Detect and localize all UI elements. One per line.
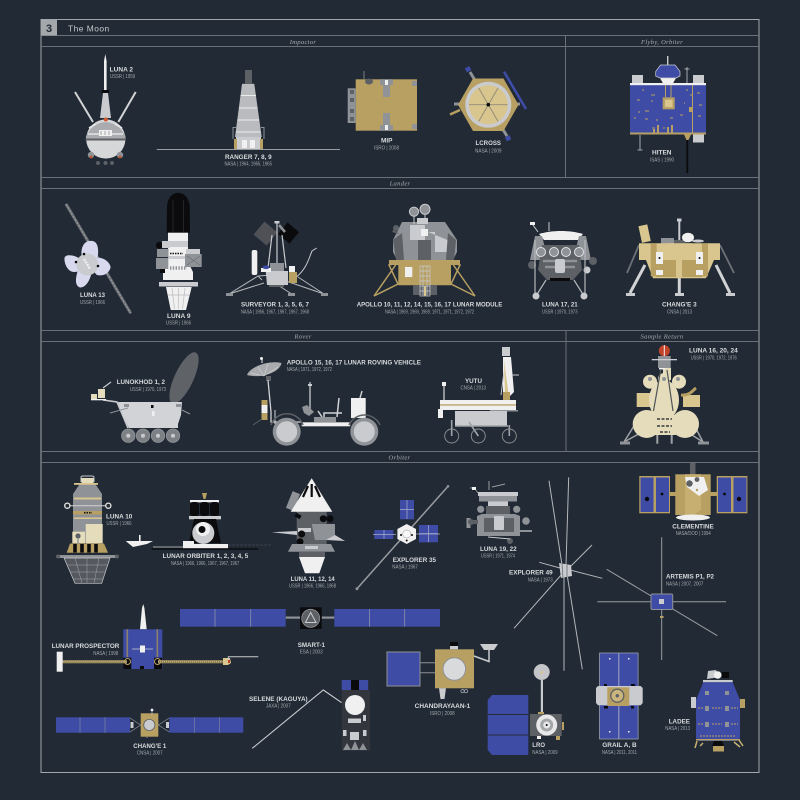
spacecraft: Chang'e 1 — [56, 709, 243, 757]
label: Lunokhod: USSR | 1970, 1973 — [130, 387, 166, 393]
icon: Lunokhod — [91, 349, 204, 443]
category: Flyby, Orbiter: Flyby, Orbiter — [640, 39, 683, 46]
label: Luna 19: LUNA 19, 22 — [480, 546, 517, 553]
icon: LADEE — [691, 670, 745, 752]
label: Chandrayaan-1: CHANDRAYAAN-1 — [415, 703, 471, 710]
label: Explorer 49 — [509, 570, 553, 583]
label: Luna 16: USSR | 1970, 1972, 1976 — [691, 355, 737, 361]
icon: Surveyor — [226, 221, 328, 296]
label: Ranger: RANGER 7, 8, 9 — [225, 154, 272, 161]
label: Luna 2 — [110, 66, 135, 80]
label: Yutu: CNSA | 2013 — [460, 386, 486, 392]
icon: Ranger — [157, 70, 340, 150]
label: Chang'e 1: CHANG'E 1 — [133, 743, 167, 750]
spacecraft: Ranger 7, 8, 9 — [157, 70, 340, 168]
label: Luna 10: LUNA 10 — [106, 514, 133, 520]
icon: Chang'e 3 — [626, 218, 735, 296]
label: Chandrayaan-1 — [415, 703, 471, 717]
spacecraft: MIP — [348, 71, 417, 151]
icon: Yutu — [438, 347, 519, 443]
label: LRO: NASA | 2009 — [532, 750, 558, 756]
label: Luna 11: USSR | 1966, 1966, 1968 — [289, 584, 336, 590]
label: Luna 13 — [80, 292, 105, 306]
label: Luna 16: LUNA 16, 20, 24 — [689, 348, 738, 354]
icon: Hiten — [630, 56, 706, 173]
icon: Luna 19 — [466, 481, 532, 544]
category: Sample Return: Sample Return — [641, 334, 684, 340]
label: Explorer 35: EXPLORER 35 — [393, 557, 436, 564]
spacecraft: Explorer 35 — [356, 485, 449, 590]
label: LRV — [287, 360, 421, 373]
label: Surveyor — [241, 301, 309, 315]
spacecraft: Smart-1 — [180, 607, 440, 656]
label: Luna 17: LUNA 17, 21 — [542, 301, 578, 308]
label: Chang'e 1 — [133, 743, 167, 757]
label: Hiten: HITEN — [652, 150, 672, 156]
label: Lunar Prospector — [52, 643, 120, 657]
spacecraft: Chandrayaan-1 — [387, 642, 498, 717]
label: Chang'e 3 — [662, 301, 697, 315]
label: Artemis — [666, 574, 714, 587]
spacecraft: Luna 2 — [75, 54, 136, 165]
label: MIP: MIP — [381, 137, 392, 144]
label: Luna 2: LUNA 2 — [110, 66, 134, 74]
icon: MIP — [348, 71, 417, 131]
icon: Lunar Orbiter — [126, 493, 272, 550]
label: LADEE: NASA | 2013 — [665, 726, 690, 732]
icon: Chandrayaan-1 — [387, 642, 498, 699]
label: MIP — [374, 137, 399, 151]
label: Surveyor: SURVEYOR 1, 3, 5, 6, 7 — [241, 301, 309, 308]
spacecraft: LCROSS — [450, 66, 526, 154]
label: Luna 19 — [480, 546, 517, 560]
spacecraft: Apollo Lunar Module — [357, 204, 502, 315]
icon: Lunar Prospector — [57, 604, 258, 672]
label: LCROSS: NASA | 2009 — [475, 148, 502, 154]
icon: Smart-1 — [180, 607, 440, 629]
icon: LRO — [488, 664, 564, 755]
label: Luna 11: LUNA 11, 12, 14 — [291, 576, 335, 583]
label: Lunar Prospector: NASA | 1998 — [93, 651, 118, 657]
label: Selene: SELENE (KAGUYA) — [249, 696, 308, 703]
label: Artemis: NASA | 2007, 2007 — [666, 581, 703, 587]
label: Explorer 49: EXPLORER 49 — [509, 570, 553, 576]
spacecraft: Luna 13 — [64, 204, 131, 313]
icon: Explorer 49 — [514, 477, 602, 671]
spacecraft: Luna 10 — [56, 476, 133, 583]
label: LADEE: LADEE — [669, 718, 690, 726]
label: Lunar Orbiter — [163, 553, 249, 567]
spacecraft: Lunar Prospector — [52, 604, 258, 672]
label: Chandrayaan-1: ISRO | 2008 — [430, 711, 455, 717]
title: 3 — [46, 23, 52, 35]
label: Chang'e 1: CNSA | 2007 — [137, 751, 163, 757]
label: Luna 17 — [542, 301, 578, 315]
label: Apollo LM — [357, 301, 502, 315]
spacecraft: Luna 9 — [156, 193, 202, 327]
label: Clementine: NASA/DOD | 1994 — [676, 531, 711, 537]
icon: Luna 17 — [528, 222, 597, 300]
label: Clementine: CLEMENTINE — [672, 524, 714, 530]
label: Luna 9 — [166, 313, 191, 327]
label: LCROSS — [475, 140, 502, 154]
label: LCROSS: LCROSS — [476, 140, 501, 147]
label: GRAIL: GRAIL A, B — [602, 742, 637, 749]
label: Chang'e 3: CHANG'E 3 — [662, 301, 697, 308]
icon: Chang'e 1 — [56, 709, 243, 738]
label: Luna 19: USSR | 1971, 1974 — [481, 554, 515, 560]
label: Smart-1 — [298, 642, 325, 656]
spacecraft: Explorer 49 — [509, 477, 602, 671]
label: LRV: NASA | 1971, 1972, 1972 — [287, 367, 332, 373]
label: Lunar Prospector: LUNAR PROSPECTOR — [52, 643, 120, 650]
label: Luna 9: USSR | 1966 — [166, 321, 191, 327]
spacecraft: Luna 19, 22 — [466, 481, 532, 560]
label: Yutu: YUTU — [465, 378, 482, 385]
category: Orbiter: Orbiter — [389, 454, 411, 462]
icon: Clementine — [639, 463, 747, 520]
spacecraft: Hiten — [630, 56, 706, 173]
label: Ranger: NASA | 1964, 1965, 1965 — [224, 162, 272, 168]
label: Luna 13: USSR | 1966 — [80, 300, 105, 306]
label: LRV: APOLLO 15, 16, 17 LUNAR ROVING VEHICLE — [287, 360, 421, 366]
label: Ranger — [224, 154, 272, 168]
spacecraft: Luna 16, 20, 24 — [620, 345, 738, 444]
label: GRAIL — [602, 742, 637, 756]
icon: Artemis — [597, 537, 726, 660]
label: Luna 13: LUNA 13 — [80, 292, 105, 299]
label: Selene — [249, 696, 308, 710]
label: Smart-1: ESA | 2003 — [300, 650, 323, 656]
title — [41, 20, 110, 36]
label: Hiten — [650, 150, 674, 164]
title: The Moon — [68, 24, 110, 34]
spacecraft: Selene — [249, 680, 370, 751]
label: Explorer 35 — [392, 557, 436, 570]
spacecraft: GRAIL A, B — [596, 653, 643, 756]
label: Lunokhod — [117, 379, 166, 393]
label: Lunokhod: LUNOKHOD 1, 2 — [117, 379, 165, 386]
icon: Luna 11 — [272, 478, 345, 573]
spacecraft: Luna 11, 12, 14 — [272, 478, 345, 590]
label: LADEE — [665, 718, 690, 732]
label: Luna 10: USSR | 1966 — [106, 521, 132, 527]
icon: LCROSS — [450, 66, 526, 141]
label: Artemis: ARTEMIS P1, P2 — [666, 574, 714, 580]
spacecraft: Chang'e 3 — [626, 218, 735, 315]
label: Chang'e 3: CNSA | 2013 — [667, 309, 692, 315]
spacecraft: Surveyor — [226, 221, 328, 315]
label: Luna 11 — [289, 576, 336, 590]
spacecraft: Luna 17, 21 — [528, 222, 597, 315]
category: Lander: Lander — [389, 180, 411, 188]
label: Clementine — [672, 524, 714, 537]
label: GRAIL: NASA | 2011, 2011 — [602, 750, 637, 756]
spacecraft: Yutu — [438, 347, 519, 443]
label: Luna 10 — [106, 514, 133, 527]
icon: Luna 16 — [620, 345, 709, 444]
label: Explorer 49: NASA | 1973 — [528, 577, 553, 583]
label: Lunar Orbiter: NASA | 1966, 1966, 1967, 1967, 1967 — [171, 561, 239, 567]
icon: GRAIL — [596, 653, 643, 739]
label: Explorer 35: NASA | 1967 — [392, 564, 418, 570]
spacecraft: Artemis P1, P2 — [597, 537, 726, 660]
category: Rover: Rover — [293, 334, 312, 340]
spacecraft: Clementine — [639, 463, 747, 537]
icon: LRV — [247, 357, 380, 446]
icon: Luna 13 — [64, 204, 131, 313]
spacecraft: Lunar Roving Vehicle — [247, 357, 421, 446]
category: Impactor: Impactor — [289, 39, 316, 46]
icon: Selene — [252, 680, 370, 751]
label: Luna 17: USSR | 1970, 1973 — [542, 309, 578, 315]
icon: Explorer 35 — [356, 485, 449, 590]
label: Luna 2: USSR | 1959 — [110, 74, 135, 80]
label: Apollo LM: APOLLO 10, 11, 12, 14, 15, 16, 17 LUNAR MODULE — [357, 301, 502, 308]
icon: Luna 10 — [56, 476, 119, 583]
spacecraft: LADEE — [665, 670, 745, 752]
icon: Apollo LM — [374, 204, 475, 296]
label: Hiten: ISAS | 1990 — [650, 158, 674, 164]
label: Selene: JAXA | 2007 — [266, 704, 291, 710]
label: Yutu — [460, 378, 486, 392]
icon: Luna 2 — [75, 54, 136, 165]
spacecraft: Lunokhod — [91, 349, 204, 443]
label: Apollo LM: NASA | 1969, 1969, 1969, 1971, 1971, 1972, 1972 — [385, 309, 474, 315]
label: LRO — [532, 742, 558, 756]
label: Surveyor: NASA | 1966, 1967, 1967, 1967, 1968 — [241, 309, 309, 315]
label: Smart-1: SMART-1 — [298, 642, 325, 649]
label: LRO: LRO — [532, 742, 545, 749]
spacecraft: LRO — [488, 664, 564, 756]
label: MIP: ISRO | 2008 — [374, 145, 399, 151]
icon: Luna 9 — [156, 193, 202, 310]
spacecraft: Lunar Orbiter — [126, 493, 272, 567]
label: Luna 9: LUNA 9 — [167, 313, 191, 320]
label: Lunar Orbiter: LUNAR ORBITER 1, 2, 3, 4, 5 — [163, 553, 249, 560]
label: Luna 16 — [689, 348, 738, 361]
